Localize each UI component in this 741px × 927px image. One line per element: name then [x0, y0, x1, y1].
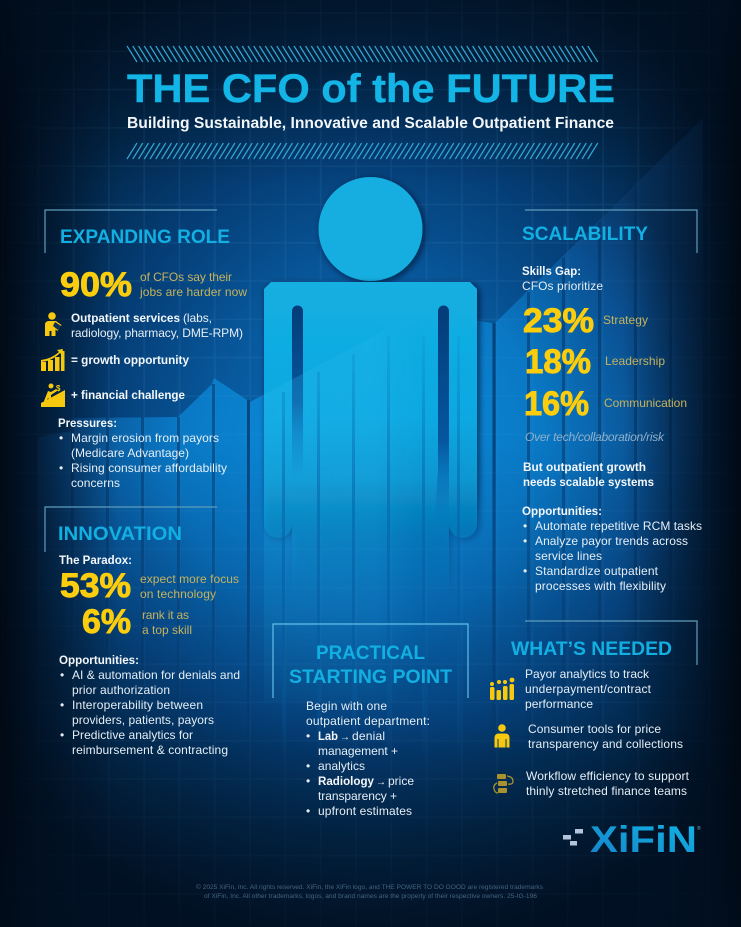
intro text: Begin with one	[306, 699, 387, 713]
department list: price	[388, 774, 414, 788]
opportunities list: service lines	[535, 549, 602, 563]
copyright: of XiFin, Inc. All other trademarks, logos, and brand names are the property of their respective owners. 25-IG-196	[204, 893, 537, 900]
pressures list: concerns	[71, 476, 120, 490]
frame	[45, 210, 217, 253]
stat 6%: 6%	[82, 603, 131, 641]
workflow efficiency text: Workflow efficiency to support	[526, 769, 690, 783]
opportunities list: Opportunities:	[522, 504, 602, 518]
frame	[45, 507, 217, 552]
frame	[525, 210, 697, 253]
figure: person silhouette	[250, 177, 477, 760]
opportunities list: Predictive analytics for	[72, 728, 193, 742]
panel: expanding role	[41, 210, 247, 490]
opportunities list	[522, 504, 702, 593]
pressures list	[58, 416, 227, 490]
heading: PRACTICAL	[316, 643, 425, 664]
icon: analytics bars	[490, 678, 514, 700]
opportunities list: Automate repetitive RCM tasks	[535, 519, 702, 533]
opportunities list: •	[60, 728, 64, 742]
opportunities list: •	[60, 668, 64, 682]
stat 16% communication: Communication	[604, 396, 687, 410]
opportunities list: reimbursement & contracting	[72, 743, 228, 757]
outpatient services text: (labs,	[183, 311, 212, 325]
department list: transparency +	[318, 789, 397, 803]
opportunities list: Standardize outpatient	[535, 564, 659, 578]
workflow efficiency text	[526, 769, 690, 798]
panel: scalability	[522, 210, 702, 593]
logo squares	[563, 829, 583, 846]
scalable systems statement	[523, 460, 654, 489]
panel: practical starting point	[273, 624, 468, 818]
heading: STARTING POINT	[289, 667, 452, 688]
chart overlay on figure	[264, 374, 384, 652]
department list: •	[306, 804, 310, 818]
intro text	[306, 699, 430, 728]
opportunities list: prior authorization	[72, 683, 170, 697]
outpatient services text	[71, 311, 243, 340]
pressures list: (Medicare Advantage)	[71, 446, 189, 460]
department list: Lab	[318, 729, 338, 743]
outpatient services text: radiology, pharmacy, DME-RPM)	[71, 326, 243, 340]
opportunities list: •	[523, 519, 527, 533]
heading: SCALABILITY	[522, 224, 648, 245]
rising bar chart backdrop	[38, 118, 703, 686]
department list: management +	[318, 744, 398, 758]
bottom hatch band	[127, 143, 598, 159]
pressures list: •	[59, 431, 63, 445]
pressures list: Rising consumer affordability	[71, 461, 227, 475]
pressures list: Margin erosion from payors	[71, 431, 219, 445]
stat caption	[139, 270, 247, 299]
stat caption: jobs are harder now	[139, 285, 247, 299]
department list	[306, 729, 414, 818]
stat 23% strategy	[523, 302, 648, 340]
icon: workflow	[494, 774, 513, 793]
opportunities list: Analyze payor trends across	[535, 534, 688, 548]
opportunities list: Interoperability between	[72, 698, 203, 712]
pressures list: Pressures:	[58, 416, 117, 430]
workflow efficiency text: thinly stretched finance teams	[526, 784, 687, 798]
registered mark: ®	[697, 825, 701, 832]
opportunities list: Opportunities:	[59, 653, 139, 667]
figure body with arms	[264, 282, 477, 640]
figure left arm slot	[292, 306, 303, 480]
pressures list: •	[59, 461, 63, 475]
icon: growth chart	[41, 349, 64, 371]
opportunities list	[59, 653, 240, 757]
frame	[273, 624, 468, 698]
stat 23% strategy: Strategy	[603, 313, 648, 327]
skills gap label: CFOs prioritize	[522, 279, 603, 293]
stat 23% strategy: 23%	[523, 302, 594, 340]
stat 16% communication: 16%	[524, 385, 589, 423]
department list: •	[306, 774, 310, 788]
consumer tools text: transparency and collections	[528, 737, 683, 751]
opportunities list: providers, patients, payors	[72, 713, 214, 727]
stat 6% caption: rank it as	[142, 608, 189, 622]
department list: •	[306, 729, 310, 743]
intro text: outpatient department:	[306, 714, 430, 728]
icon: consumer person	[494, 724, 510, 748]
payor analytics text	[525, 667, 652, 711]
figure head	[318, 177, 422, 281]
panel: what's needed	[490, 621, 697, 798]
panel: innovation	[45, 507, 240, 757]
bar dividers over figure	[282, 336, 460, 760]
title block	[127, 46, 615, 159]
payor analytics text: Payor analytics to track	[525, 667, 650, 681]
copyright	[196, 883, 544, 900]
stat 6% caption: a top skill	[142, 623, 192, 637]
financial challenge text: + financial challenge	[71, 388, 185, 402]
department list: denial	[352, 729, 385, 743]
payor analytics text: underpayment/contract	[525, 682, 652, 696]
paradox label: The Paradox:	[59, 553, 132, 567]
stat 90%: 90%	[60, 266, 132, 304]
heading: EXPANDING ROLE	[60, 227, 230, 248]
stat 6% caption	[142, 608, 192, 637]
heading: INNOVATION	[58, 524, 182, 545]
heading	[289, 643, 452, 688]
skills gap label: Skills Gap:	[522, 264, 581, 278]
opportunities list: processes with flexibility	[535, 579, 666, 593]
department list: →	[340, 732, 350, 743]
scalable systems statement: needs scalable systems	[523, 475, 654, 489]
skills gap label	[522, 264, 603, 293]
department list: analytics	[318, 759, 365, 773]
department list: →	[376, 777, 386, 788]
icon: climbing with dollar	[41, 384, 65, 407]
opportunities list: •	[523, 534, 527, 548]
stat 18% leadership: Leadership	[605, 354, 665, 368]
copyright: © 2025 XiFin, Inc. All rights reserved. XiFin, the XiFin logo, and THE POWER TO DO GOOD are registered trademarks	[196, 883, 544, 891]
stat caption: of CFOs say their	[140, 270, 232, 284]
consumer tools text: Consumer tools for price	[528, 722, 661, 736]
opportunities list: AI & automation for denials and	[72, 668, 240, 682]
stat 18% leadership	[525, 343, 665, 381]
XiFin logo	[563, 819, 701, 860]
outpatient services text: Outpatient services	[71, 311, 180, 325]
scalable systems statement: But outpatient growth	[523, 460, 646, 474]
italic note: Over tech/collaboration/risk	[525, 430, 665, 444]
frame	[525, 621, 697, 665]
department list: •	[306, 759, 310, 773]
opportunities list: •	[523, 564, 527, 578]
main title: THE CFO of the FUTURE	[127, 67, 615, 111]
payor analytics text: performance	[525, 697, 593, 711]
subtitle: Building Sustainable, Innovative and Scalable Outpatient Finance	[127, 115, 614, 132]
icon: person with clipboard	[45, 312, 62, 336]
consumer tools text	[528, 722, 683, 751]
stat 53% caption	[140, 572, 239, 601]
stat 53% caption: on technology	[140, 587, 216, 601]
logo wordmark: XiFiN	[590, 819, 697, 860]
stat 18% leadership: 18%	[525, 343, 591, 381]
stat 53%: 53%	[60, 567, 131, 605]
figure right arm slot	[434, 306, 449, 530]
top hatch band	[127, 46, 598, 62]
stat 53% caption: expect more focus	[140, 572, 239, 586]
growth opportunity text: = growth opportunity	[71, 353, 189, 367]
department list: Radiology	[318, 774, 374, 788]
icon: climbing with dollar: $	[56, 384, 61, 393]
department list: upfront estimates	[318, 804, 412, 818]
stat 16% communication	[524, 385, 687, 423]
opportunities list: •	[60, 698, 64, 712]
heading: WHAT’S NEEDED	[511, 639, 672, 660]
